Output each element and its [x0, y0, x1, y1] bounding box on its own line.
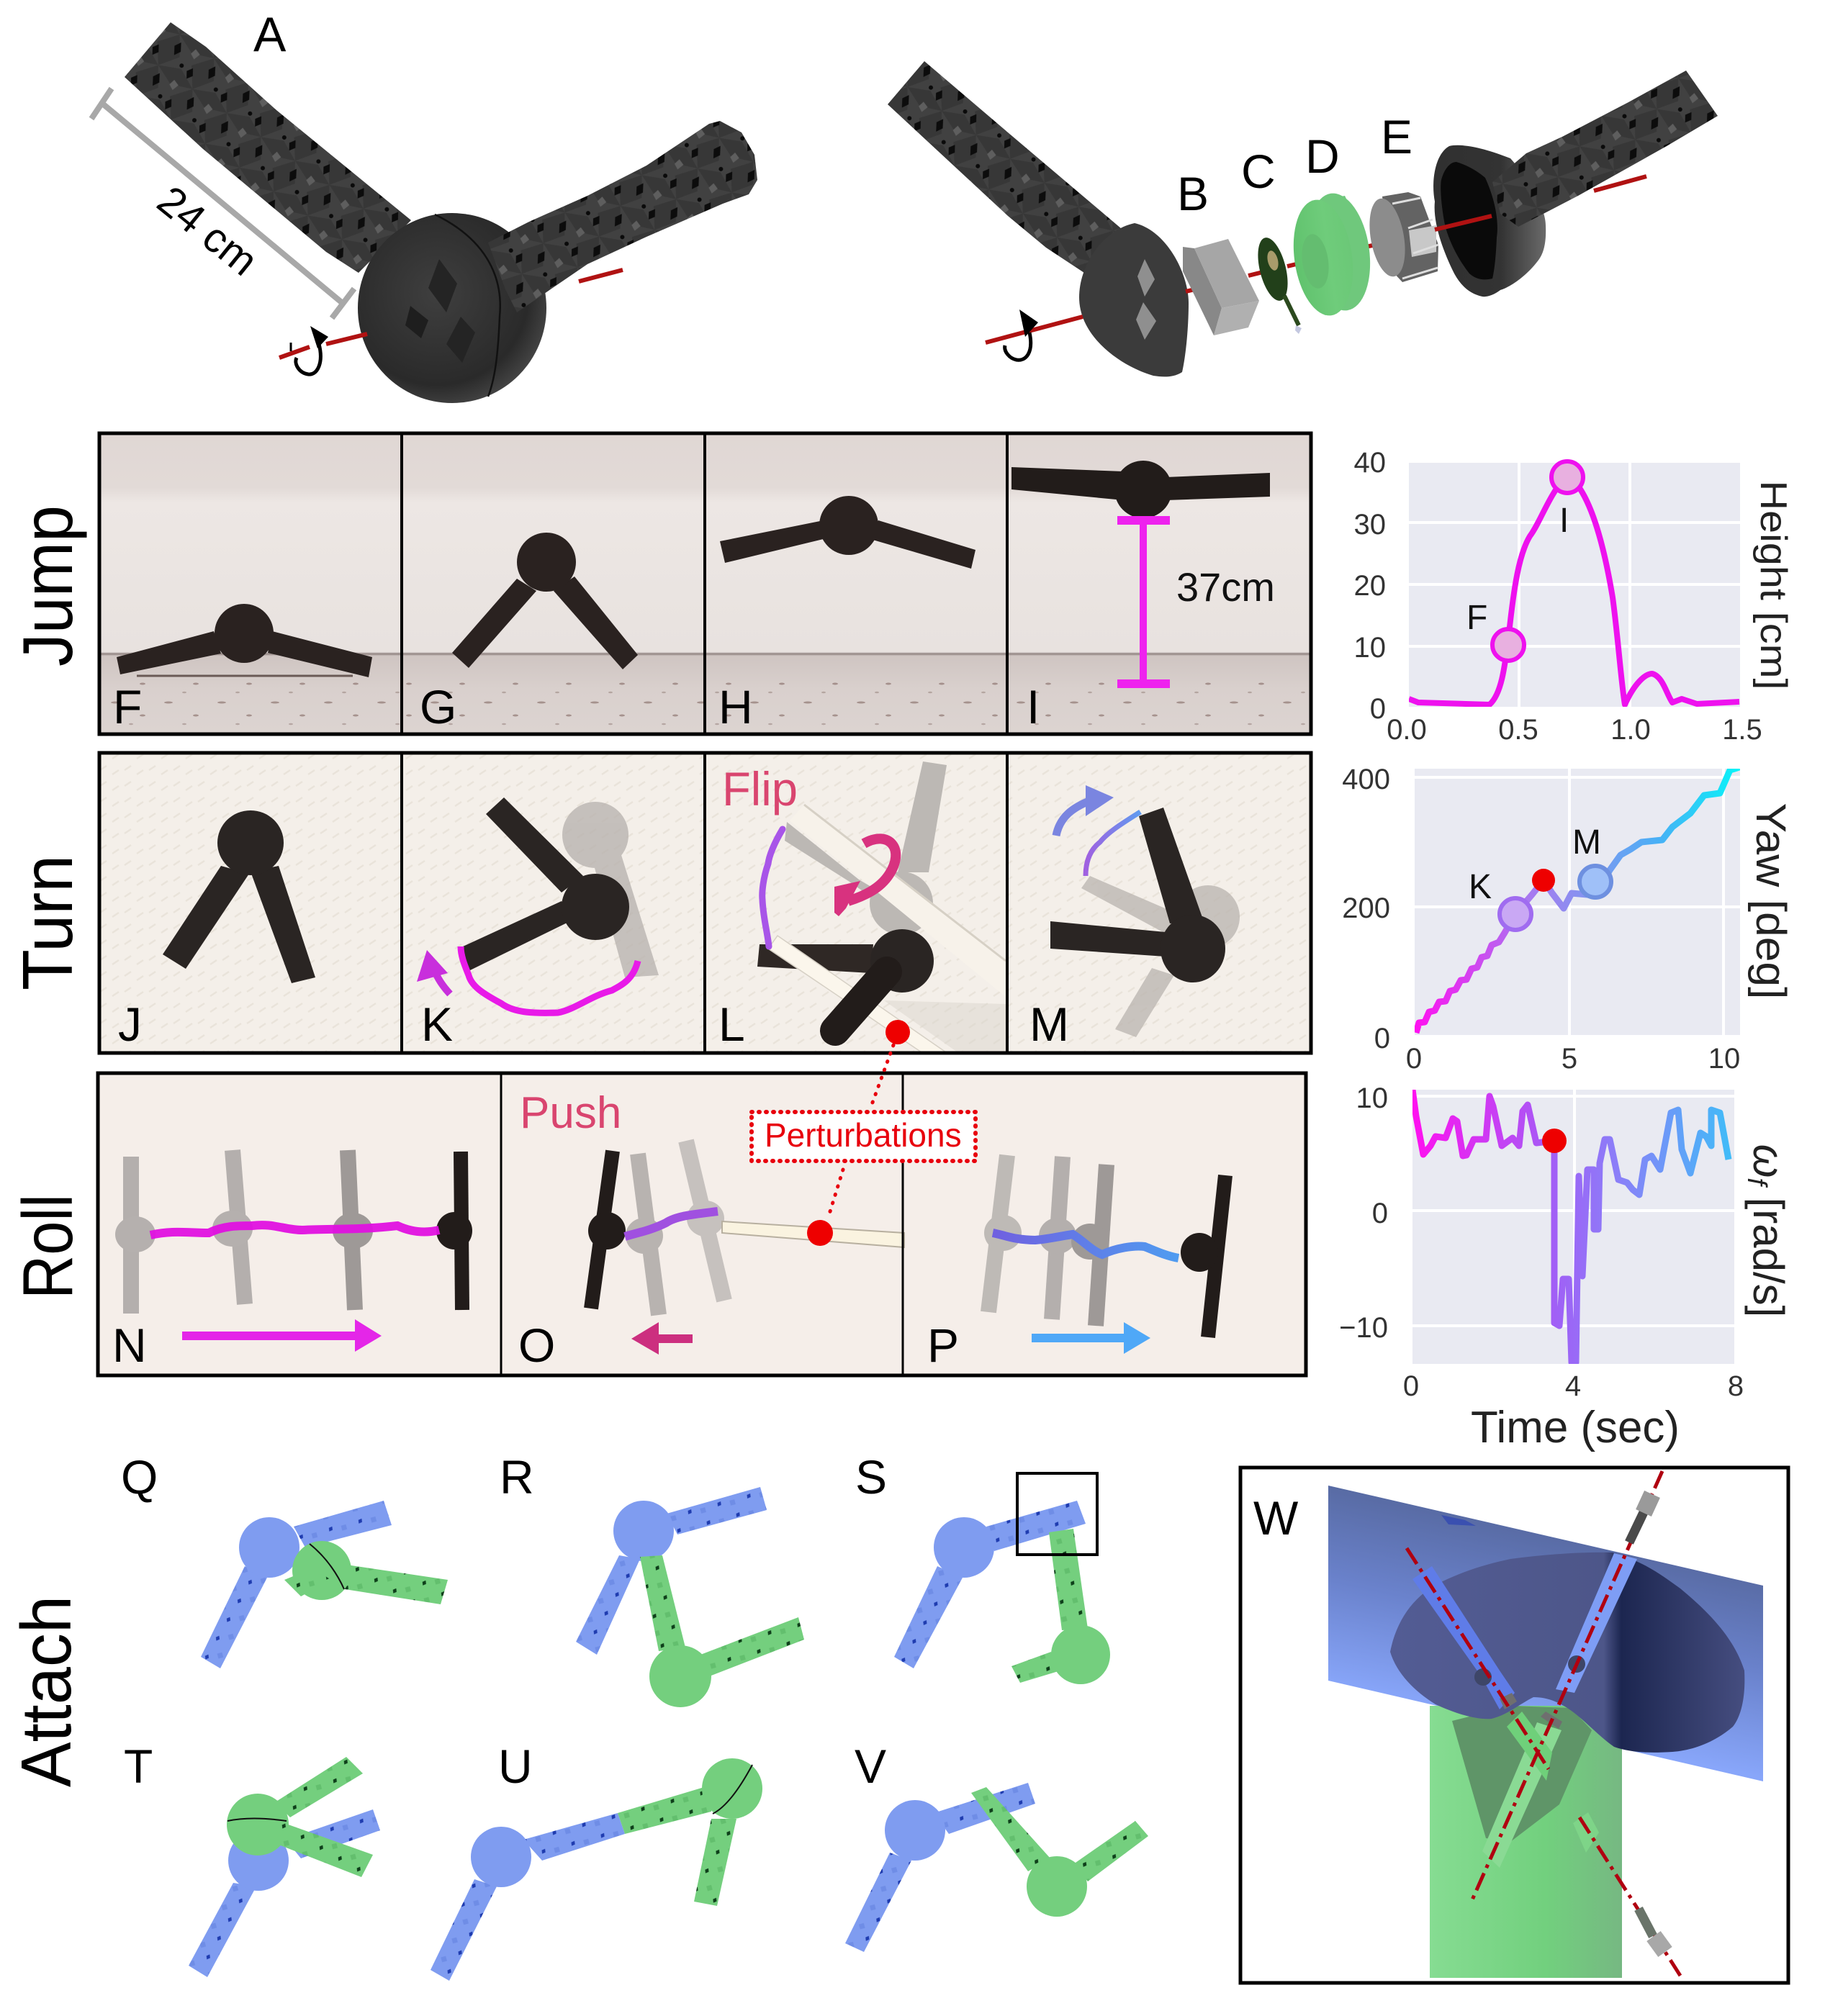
- N arrow: [182, 1319, 382, 1352]
- frame dividers: [402, 433, 1007, 734]
- x tick labels: [1403, 1370, 1744, 1402]
- L trajectory: [762, 829, 783, 946]
- red perturbation marker: [1542, 1129, 1567, 1153]
- marker labels: [1469, 823, 1601, 906]
- labels N O P: [112, 1319, 959, 1372]
- M trajectory: [1086, 812, 1140, 876]
- green slot: [1573, 1812, 1599, 1853]
- x axis title: Time (sec): [1471, 1403, 1680, 1452]
- chart: angular velocity vs time: [1339, 1082, 1793, 1452]
- dimension label: 24 cm: [148, 177, 266, 285]
- frame M ghost: [1081, 876, 1240, 1037]
- frame L robot: [757, 929, 946, 1052]
- labels J K L M: [118, 998, 1069, 1051]
- labels F G H I: H: [718, 680, 753, 733]
- O trajectory: [625, 1211, 718, 1237]
- labels F G H I: [113, 680, 1040, 733]
- heading: Turn: Turn: [8, 855, 87, 990]
- frame P ghosts: [984, 1155, 1109, 1326]
- beam cut-out: [1390, 1552, 1744, 1753]
- marker I: [1551, 461, 1583, 493]
- labels J K L M: J: [118, 998, 142, 1051]
- chart: yaw vs time: [1342, 764, 1794, 1075]
- y tick labels: 200: [1342, 892, 1390, 924]
- panel T: attach pose: T: [124, 1740, 153, 1793]
- height label: 37cm: [1176, 564, 1275, 610]
- x tick labels: [1387, 714, 1762, 746]
- robot A sphere: [358, 213, 546, 403]
- panel S: attach pose: [855, 1450, 1110, 1684]
- perturbation dot in O: [807, 1220, 833, 1246]
- screw top: [1629, 1494, 1652, 1542]
- stick over arm: [768, 936, 946, 1052]
- height curve: [1409, 474, 1739, 705]
- frame G: [452, 533, 638, 669]
- y tick labels: −10: [1339, 1312, 1388, 1344]
- turn frame border: [99, 753, 1311, 1053]
- frame M robot: [1050, 808, 1225, 982]
- perturbation dot in L: [886, 1020, 910, 1044]
- panel: Roll photo strip: [98, 1073, 1306, 1375]
- y tick labels: 10: [1353, 632, 1386, 664]
- y axis title: [rad/s]: [1744, 1185, 1793, 1317]
- x tick labels: 1.0: [1610, 714, 1651, 746]
- frame N robot: [436, 1152, 472, 1310]
- panel: Turn photo strip: [99, 753, 1311, 1053]
- jump frame border: [99, 433, 1311, 734]
- panel S: attach pose: S: [855, 1450, 887, 1504]
- marker labels: I: [1559, 502, 1569, 540]
- exploded left arm: [888, 61, 1122, 273]
- y tick labels: 30: [1353, 509, 1386, 541]
- label W: W: [1253, 1491, 1299, 1545]
- y tick labels: 40: [1353, 447, 1386, 479]
- frame J: [163, 810, 315, 983]
- blue strut right: [1556, 1553, 1637, 1693]
- label C: C: [1241, 145, 1276, 198]
- component D: green gear: [1287, 189, 1377, 320]
- marker labels: [1466, 502, 1569, 637]
- y tick labels: [1342, 764, 1390, 1054]
- right hemisphere cup: [1433, 145, 1546, 297]
- height bar 37cm: [1117, 516, 1170, 688]
- O arrow: [631, 1322, 693, 1355]
- perturbations box: [752, 1112, 975, 1161]
- x tick labels: 4: [1565, 1370, 1581, 1402]
- plot area: [1412, 1090, 1734, 1364]
- blue beam: [1328, 1486, 1763, 1781]
- panel W: joint detail: [1240, 1468, 1788, 1983]
- marker K: [1500, 898, 1531, 930]
- labels J K L M: K: [421, 998, 453, 1051]
- green strut long: [1482, 1722, 1562, 1868]
- rotation axis: [279, 270, 623, 358]
- robot A right arm: [488, 121, 757, 312]
- component B: battery: [1183, 239, 1259, 335]
- frame P robot: [1181, 1175, 1225, 1337]
- blue strut left: [1412, 1566, 1515, 1709]
- y tick labels: 0: [1372, 1198, 1388, 1229]
- green column: [1430, 1706, 1622, 1978]
- N trajectory: [150, 1225, 439, 1235]
- labels N O P: N: [112, 1319, 147, 1372]
- O stick: [722, 1221, 904, 1247]
- x tick labels: 0: [1406, 1043, 1422, 1075]
- K trajectory: [461, 946, 638, 1013]
- marker labels: K: [1469, 868, 1492, 906]
- frame K ghost: [562, 802, 659, 977]
- panel R: attach pose: R: [500, 1450, 534, 1504]
- dimension bracket: [91, 89, 354, 318]
- frame O robot: [588, 1151, 626, 1308]
- labels F G H I: I: [1027, 680, 1040, 733]
- left hemisphere: [1079, 223, 1189, 376]
- panel T: attach pose: [124, 1740, 380, 1977]
- labels F G H I: G: [420, 680, 456, 733]
- panel R: attach pose: [500, 1450, 804, 1707]
- x tick labels: 1.5: [1722, 714, 1762, 746]
- K arrow: [417, 950, 450, 994]
- angular velocity curve: [1412, 1090, 1729, 1362]
- y axis title: Height [cm]: [1752, 481, 1794, 690]
- marker F: [1492, 629, 1524, 661]
- label E: E: [1381, 110, 1412, 163]
- dark cut in column: [1452, 1706, 1592, 1842]
- heading: Roll: Roll: [8, 1194, 87, 1299]
- y tick labels: 0: [1370, 693, 1386, 725]
- exploded right arm: [1492, 71, 1718, 227]
- panel U: attach pose: [431, 1740, 762, 1981]
- x tick labels: 0.0: [1387, 714, 1427, 746]
- red dash-dot axes: [1407, 1471, 1680, 1976]
- dotted leader lines: [828, 1045, 893, 1219]
- frame K robot: [463, 797, 629, 971]
- frame N ghosts: [115, 1150, 373, 1314]
- labels J K L M: M: [1029, 998, 1069, 1051]
- turn dividers: [402, 753, 1007, 1053]
- plot area: [1409, 463, 1740, 707]
- bolts: [1474, 1655, 1585, 1729]
- marker labels: M: [1572, 823, 1601, 862]
- frame L ghost and sticks: [785, 761, 1006, 1052]
- x tick labels: [1406, 1043, 1740, 1075]
- labels F G H I: F: [113, 680, 142, 733]
- flip arrow: [834, 839, 896, 916]
- panel: Jump photo strip: [99, 433, 1311, 734]
- Push label: Push: [520, 1088, 621, 1138]
- roll dividers: [501, 1073, 903, 1375]
- axis inside cup: [1435, 216, 1492, 230]
- robot A left arm: [125, 22, 411, 273]
- component E: motor: [1364, 192, 1438, 282]
- panel Q: attach pose: [121, 1450, 448, 1668]
- y tick labels: [1339, 1082, 1388, 1344]
- panel A: assembled robot: [91, 7, 757, 403]
- x tick labels: 5: [1562, 1043, 1577, 1075]
- label B: B: [1177, 167, 1209, 220]
- y tick labels: 10: [1356, 1082, 1388, 1114]
- P arrow: [1032, 1322, 1150, 1354]
- x tick labels: 0.5: [1498, 714, 1538, 746]
- y tick labels: 400: [1342, 764, 1390, 795]
- heading: Attach: Attach: [6, 1596, 86, 1787]
- roll frame border: [98, 1073, 1306, 1375]
- detail box: [1017, 1473, 1097, 1555]
- y tick labels: 0: [1374, 1023, 1390, 1054]
- x tick labels: 10: [1708, 1043, 1740, 1075]
- labels J K L M: L: [718, 998, 745, 1051]
- P trajectory: [993, 1233, 1179, 1258]
- x tick labels: 0: [1403, 1370, 1419, 1402]
- panel U: attach pose: U: [498, 1740, 533, 1793]
- marker M: [1580, 866, 1611, 898]
- perturbations label: Perturbations: [765, 1116, 962, 1154]
- axis segments: [986, 176, 1646, 343]
- frame F: [117, 604, 372, 677]
- chart: height vs time: [1353, 447, 1794, 746]
- y axis title: ω: [1744, 1144, 1793, 1177]
- label A: A: [253, 7, 287, 62]
- Flip label: Flip: [722, 762, 798, 815]
- panel V: attach pose: [845, 1740, 1148, 1952]
- x tick labels: 8: [1728, 1370, 1744, 1402]
- frame O ghosts: [626, 1141, 724, 1315]
- yaw curve: [1416, 767, 1739, 1033]
- frame I: [1011, 461, 1270, 518]
- green strut short: [1507, 1712, 1552, 1781]
- y axis title: f: [1741, 1177, 1772, 1188]
- screw bottom: [1639, 1909, 1665, 1952]
- y tick labels: 20: [1353, 570, 1386, 602]
- heading: Jump: Jump: [8, 505, 87, 666]
- label D: D: [1305, 130, 1340, 183]
- labels N O P: P: [927, 1319, 959, 1372]
- panel V: attach pose: V: [855, 1740, 886, 1793]
- plot area: [1415, 769, 1740, 1035]
- y axis title: Yaw [deg]: [1747, 803, 1794, 999]
- y tick labels: [1353, 447, 1386, 725]
- marker labels: F: [1466, 599, 1487, 637]
- M arrow: [1056, 785, 1114, 836]
- component C: circuit board: [1253, 235, 1302, 334]
- perturbation callout: [752, 1020, 975, 1246]
- panel: exploded view: [888, 61, 1718, 376]
- red perturbation marker: [1532, 869, 1555, 892]
- panel Q: attach pose: Q: [121, 1450, 158, 1504]
- rotation arrow: [291, 326, 328, 374]
- labels N O P: O: [518, 1319, 555, 1372]
- rotation arrow: [1005, 309, 1038, 360]
- frame H: [720, 496, 975, 569]
